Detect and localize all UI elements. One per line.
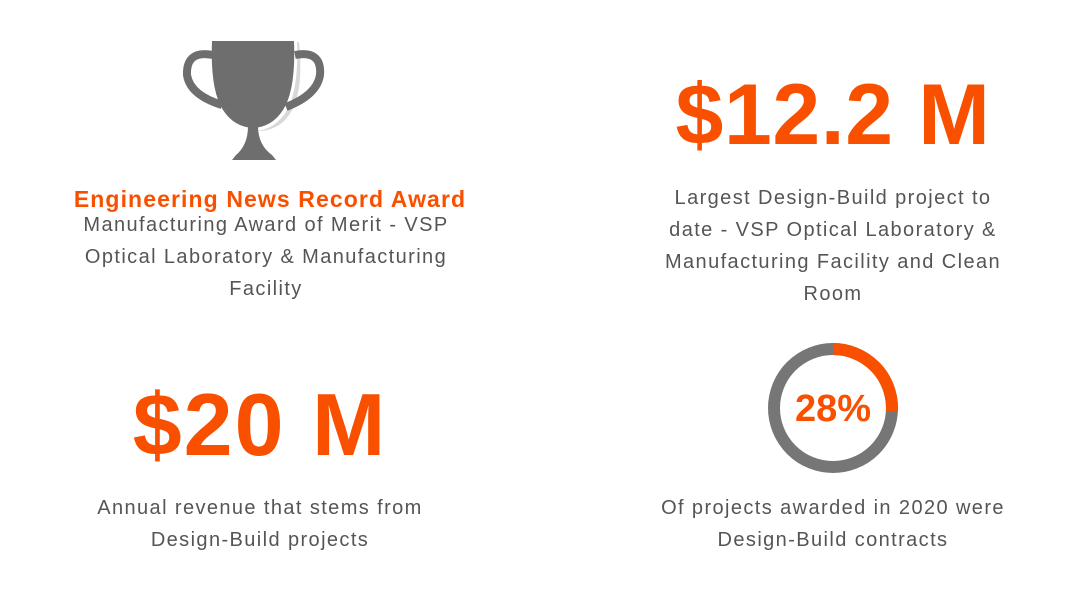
stat: 20M: $20 M — [133, 375, 387, 474]
text: projects awarded: Design-Build contracts — [718, 529, 948, 551]
text: annual revenue: Design-Build projects — [151, 529, 369, 551]
text: award description: Manufacturing Award of Merit - VSP — [83, 214, 449, 236]
chart: donut 28% — [768, 343, 898, 473]
text: award description — [83, 214, 449, 300]
text: projects awarded: Of projects awarded in 2020 were — [661, 497, 1005, 519]
icon: trophy — [183, 41, 324, 160]
text: largest project: Largest Design-Build project to — [675, 187, 991, 209]
text: annual revenue — [97, 497, 423, 551]
text: award description: Facility — [229, 278, 303, 300]
text: award description: Optical Laboratory & Manufacturing — [85, 246, 447, 268]
label: 28%: 28% — [795, 388, 871, 430]
text: largest project: Manufacturing Facility and Clean — [665, 251, 1001, 273]
text: largest project: Room — [804, 283, 862, 305]
stat: 12.2M: $12.2 M — [676, 67, 990, 163]
text: largest project — [665, 187, 1001, 305]
heading: award: Engineering News Record Award — [74, 186, 466, 212]
text: largest project: date - VSP Optical Laboratory & — [669, 219, 997, 241]
text: projects awarded — [661, 497, 1005, 551]
text: annual revenue: Annual revenue that stems from — [97, 497, 423, 519]
